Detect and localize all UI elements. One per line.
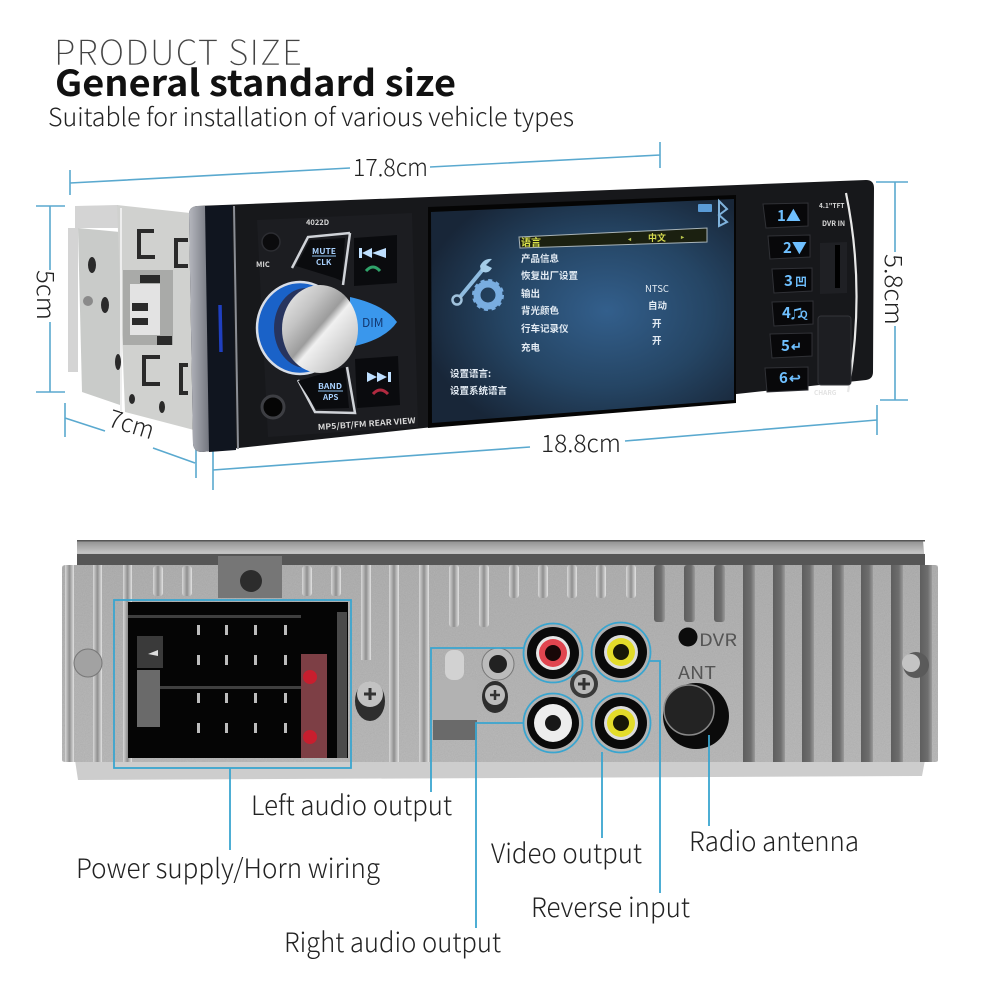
settings menu text: 背光颜色 <box>521 303 560 317</box>
RCA red <box>527 627 579 679</box>
callout: video output <box>491 694 650 871</box>
callout: video output: Video output <box>491 832 642 871</box>
rear heat sink <box>62 565 938 762</box>
preset buttons: 凹 <box>795 273 807 290</box>
callout: reverse input: Reverse input <box>531 886 690 925</box>
DVR port: DVR <box>699 626 737 651</box>
settings menu text: 语言 <box>521 234 541 249</box>
callout: left audio output: Left audio output <box>251 784 452 823</box>
DVR port <box>678 626 737 651</box>
DIM button <box>350 297 397 347</box>
panel small labels: DVR IN <box>822 219 845 229</box>
mute button <box>296 238 345 281</box>
settings menu text: ▸ <box>680 232 685 241</box>
top plate <box>77 540 925 565</box>
screw under port <box>482 681 508 713</box>
callout: radio antenna: Radio antenna <box>689 820 859 859</box>
heading: general standard size: General standard size <box>55 55 456 107</box>
dimension: 18.8cm width <box>213 405 877 490</box>
callout: left audio output <box>251 624 582 823</box>
SD card slot <box>820 242 847 294</box>
RCA white <box>527 697 579 749</box>
settings menu text: 开 <box>652 316 662 330</box>
radio front panel <box>189 180 874 452</box>
panel small labels: MP5/BT/FM REAR VIEW <box>317 415 417 433</box>
bottom lip <box>75 760 925 780</box>
callout: reverse input <box>531 622 690 925</box>
RCA yellow top <box>595 626 647 678</box>
antenna socket: ANT <box>678 659 716 685</box>
callout: power supply wiring: Power supply/Horn wiring <box>76 847 380 886</box>
USB flap <box>818 316 851 385</box>
volume knob <box>282 285 358 373</box>
halo inner ring <box>274 288 338 368</box>
panel small labels <box>256 200 845 433</box>
band button <box>298 367 349 409</box>
preset buttons <box>763 203 813 392</box>
settings menu text: 设置语言: <box>450 366 491 380</box>
dimension: 17.8cm width: 17.8cm <box>353 148 428 183</box>
dimension: 7cm depth: 7cm <box>105 399 159 447</box>
settings menu text: 恢复出厂设置 <box>521 268 579 282</box>
panel small labels: 4.1"TFT <box>819 200 844 210</box>
panel small labels: CHARG <box>814 387 837 397</box>
preset buttons: 3 <box>784 270 793 291</box>
title block <box>48 25 574 134</box>
metal texture <box>62 565 938 762</box>
dimension: 5.8cm height: 5.8cm <box>878 254 913 325</box>
callout: right audio output: Right audio output <box>284 921 501 960</box>
icon: bluetooth and battery <box>698 201 727 226</box>
settings menu text: ◂ <box>627 234 632 243</box>
right mount screw <box>902 652 929 678</box>
settings menu text: 输出 <box>521 286 540 300</box>
heading: product size: PRODUCT SIZE <box>54 25 302 76</box>
settings menu text <box>450 228 707 397</box>
mute button: MUTE <box>312 246 336 257</box>
screen <box>428 195 736 428</box>
panel small labels: MIC <box>256 259 270 270</box>
screw near connector <box>355 681 385 721</box>
preset buttons: 1▲ <box>777 205 801 226</box>
callout: right audio output <box>284 694 582 960</box>
previous button <box>354 235 397 286</box>
rear of radio <box>62 540 938 780</box>
subtitle: Suitable for installation of various vehicle types <box>48 98 574 134</box>
band button: APS <box>322 392 338 403</box>
settings menu text: 自动 <box>648 298 668 312</box>
preset buttons: Q <box>800 306 808 321</box>
preset buttons: ↩ <box>789 368 801 388</box>
dimension: 5cm height <box>30 206 65 392</box>
next button <box>355 356 400 408</box>
small port <box>482 648 514 680</box>
heat sink fins <box>65 565 932 762</box>
callout: power supply wiring <box>76 600 380 886</box>
RCA yellow bottom <box>595 697 647 749</box>
recessed slot <box>433 680 477 740</box>
control silver trim <box>292 233 355 413</box>
white bezel highlight <box>846 193 857 392</box>
settings menu text: NTSC <box>645 281 669 295</box>
dimension: 7cm depth <box>65 399 196 478</box>
dimension: 5.8cm height <box>876 182 913 400</box>
knob blue halo <box>257 282 343 374</box>
dimension: 18.8cm width: 18.8cm <box>541 424 621 459</box>
antenna socket <box>663 659 729 749</box>
icon: wrench and gear <box>452 259 502 310</box>
preset buttons: ↵ <box>791 336 802 355</box>
preset buttons: 4 <box>782 302 791 323</box>
mic jack <box>262 233 280 251</box>
DIM label: DIM <box>362 314 384 331</box>
preset buttons: 2▼ <box>783 237 807 258</box>
red fuse <box>301 654 327 758</box>
aux jack <box>262 396 284 418</box>
left mount screw <box>74 649 102 677</box>
center screw <box>570 670 598 698</box>
top screw <box>240 570 262 592</box>
top center bracket <box>218 556 282 598</box>
mute button: CLK <box>316 257 332 268</box>
panel small labels: 4022D <box>306 217 329 228</box>
settings menu text: 充电 <box>521 340 540 354</box>
settings menu text: 开 <box>652 333 662 347</box>
radio chassis: metal side cage <box>68 205 194 430</box>
settings menu text: 产品信息 <box>521 251 560 265</box>
settings menu text: 行车记录仪 <box>521 321 569 335</box>
settings menu text: 中文 <box>648 231 666 244</box>
settings menu text: 设置系统语言 <box>450 383 508 397</box>
ISO wiring connector <box>128 602 348 758</box>
preset buttons: 6 <box>779 367 788 388</box>
dimension: 17.8cm width <box>70 142 660 195</box>
preset buttons: ♫ <box>791 305 803 322</box>
band button: BAND <box>318 381 342 392</box>
dimension: 5cm height: 5cm <box>30 270 65 320</box>
light window <box>445 650 464 680</box>
preset buttons: 5 <box>781 335 790 356</box>
